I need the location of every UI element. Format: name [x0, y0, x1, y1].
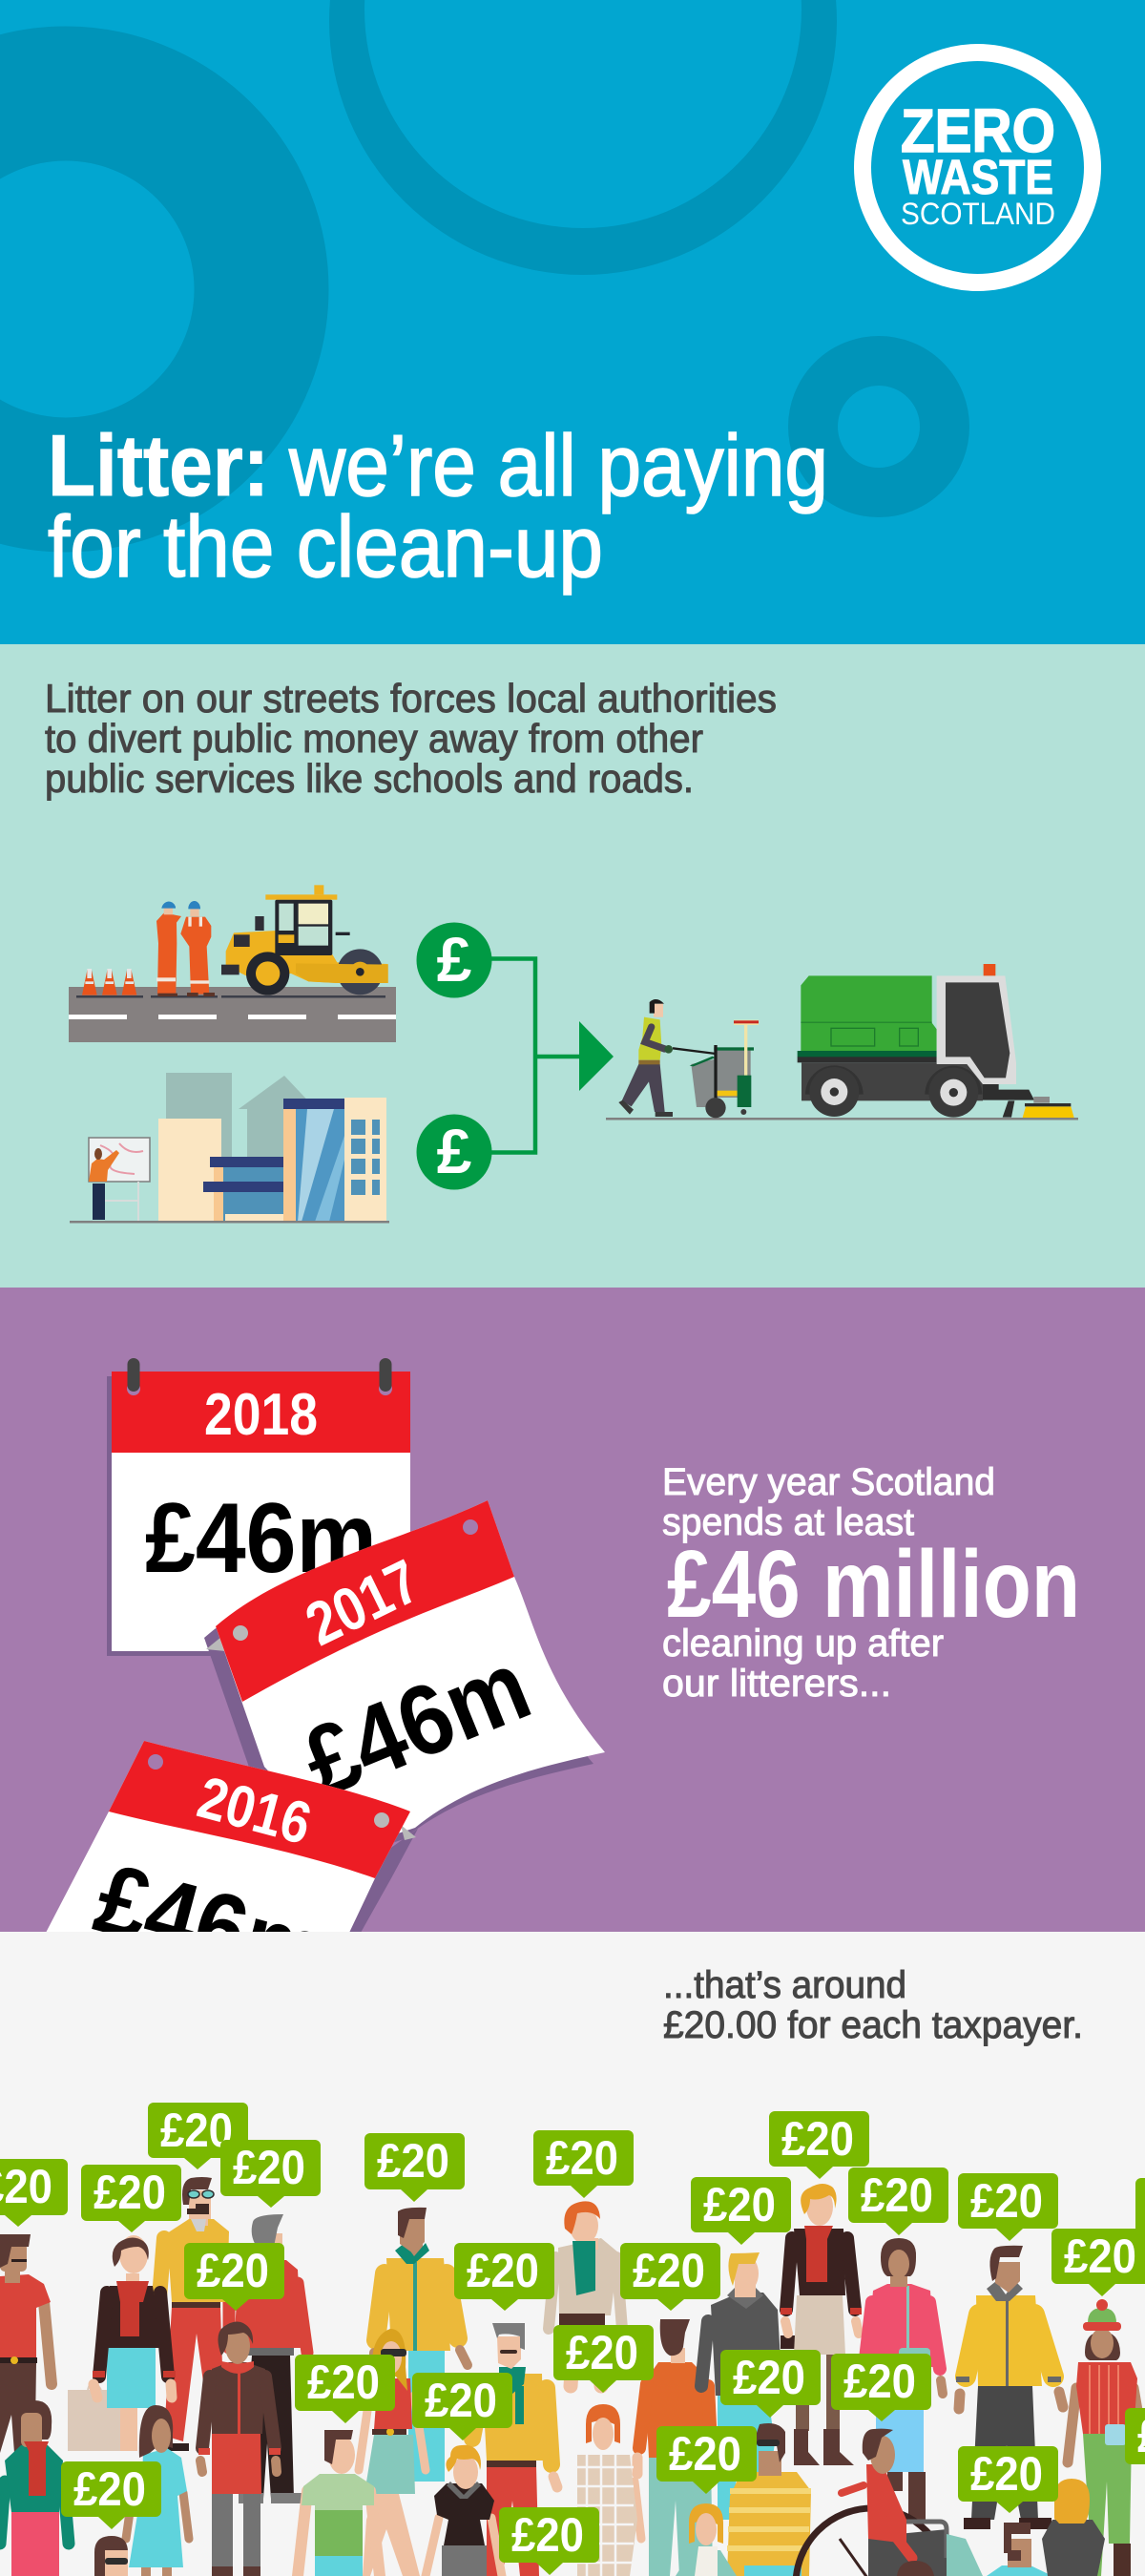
tag	[148, 2103, 248, 2169]
calendar 2018: 2018	[204, 1382, 318, 1448]
icon: pound coin top	[416, 922, 492, 998]
tag	[1135, 2178, 1145, 2233]
price tags: £20	[0, 2103, 1145, 2575]
title: Litter:	[48, 418, 269, 514]
person: man with glasses and yellow jumper	[158, 2177, 229, 2451]
tag	[81, 2165, 181, 2232]
calendar 2016: 2016	[191, 1765, 318, 1857]
tag: £20	[970, 2174, 1043, 2228]
tag: £20	[970, 2447, 1043, 2501]
tag: £20	[843, 2355, 916, 2408]
text: cost per taxpayer: £20.00 for each taxpayer.	[663, 2004, 1083, 2046]
tag	[553, 2325, 654, 2393]
background ring: right	[813, 361, 945, 492]
tag: £20	[425, 2374, 497, 2427]
whiteboard and planner	[89, 1138, 150, 1221]
tag	[0, 2159, 68, 2227]
crowd of people	[0, 2177, 1143, 2576]
person: man in orange jumper	[637, 2319, 713, 2576]
tag	[848, 2168, 948, 2235]
text: cost per taxpayer	[663, 1964, 1083, 2046]
illustration: road works	[69, 885, 396, 1042]
tag: £20	[703, 2178, 776, 2231]
tag: £20	[733, 2351, 805, 2404]
person: man in grey hoodie	[701, 2252, 809, 2520]
workers	[156, 913, 211, 995]
person: man with grey hair in red jumper	[229, 2214, 307, 2503]
title: we’re all paying	[288, 418, 828, 514]
tag: £20	[160, 2104, 233, 2157]
person: man with moustache and yellow jumper	[472, 2323, 557, 2576]
person: wheelchair user	[796, 2429, 983, 2576]
calendar 2018	[107, 1358, 410, 1656]
tag: £20	[669, 2427, 741, 2481]
tag	[656, 2426, 757, 2494]
person: man in light green t-shirt	[298, 2430, 380, 2576]
person: woman in dark jacket with scarf and bag	[68, 2235, 176, 2451]
title: for the clean-up	[48, 499, 603, 596]
person: woman in green jacket and pink skirt	[0, 2400, 69, 2576]
tag: £20	[1064, 2230, 1136, 2283]
person: woman in grey t-shirt, bottom right	[1042, 2479, 1105, 2576]
logo: Zero Waste Scotland: ZERO	[901, 96, 1055, 165]
illustration: street sweeper and worker	[606, 964, 1078, 1120]
person: bearded man, bottom right	[987, 2523, 1052, 2576]
person: woman in cyan dress	[126, 2405, 189, 2576]
tag	[533, 2130, 634, 2198]
text: £46 million per year: Every year Scotland	[662, 1461, 995, 1503]
person: woman with sunglasses, bottom left	[94, 2536, 128, 2576]
tag: £20	[377, 2134, 449, 2188]
tag: £20	[73, 2462, 146, 2516]
icon: pound coin bottom: £	[437, 1116, 472, 1186]
tag: £20	[633, 2244, 705, 2297]
tag	[691, 2177, 791, 2245]
arrow: money flow	[491, 958, 614, 1153]
tag	[831, 2354, 931, 2421]
person: man in yellow jacket with teal collar	[374, 2208, 468, 2482]
cones	[82, 969, 136, 995]
text: £46 million per year: spends at least	[662, 1501, 914, 1543]
intro text: Litter on our streets forces local authorities	[45, 676, 777, 721]
panel: crowd of taxpayers	[0, 1932, 1145, 2576]
calendar 2017	[204, 1500, 605, 1863]
tag: £20	[861, 2168, 933, 2222]
worker with cart	[618, 999, 759, 1118]
tag	[295, 2355, 395, 2423]
person: woman in striped top and hat	[1068, 2299, 1143, 2576]
logo: Zero Waste Scotland: WASTE	[903, 150, 1053, 204]
tag	[1051, 2229, 1145, 2296]
calendar 2016	[46, 1741, 418, 2010]
tag: £20	[197, 2244, 269, 2297]
tag	[499, 2507, 599, 2575]
person: man in striped jumper with sunglasses	[727, 2423, 811, 2576]
person: woman with brown jacket and red skirt	[198, 2321, 281, 2576]
tag: £20	[511, 2508, 584, 2562]
tag: £20	[566, 2326, 638, 2379]
intro text: public services like schools and roads.	[45, 756, 694, 801]
calendar 2017: £46m	[288, 1630, 545, 1819]
tag	[958, 2173, 1058, 2241]
panel: public money diverted to clean-up	[0, 644, 1145, 1288]
tag	[620, 2243, 720, 2311]
text: £46 million per year: cleaning up after	[662, 1623, 944, 1665]
tag	[184, 2243, 284, 2311]
person: woman in pink top	[864, 2238, 943, 2522]
icon: pound coin top: £	[437, 924, 472, 995]
tag	[720, 2350, 821, 2418]
person: woman with sunglasses and teal skirt	[359, 2329, 426, 2576]
calendar 2018: £46m	[145, 1483, 377, 1594]
title	[48, 418, 828, 596]
tag	[1125, 2408, 1145, 2464]
tag	[958, 2446, 1058, 2513]
text: £46 million per year: our litterers...	[662, 1663, 891, 1705]
tag	[220, 2140, 321, 2208]
tag: £20	[781, 2112, 854, 2166]
sweeper vehicle	[798, 964, 1074, 1118]
person: man in yellow jacket with grey trousers	[956, 2246, 1063, 2529]
calendar 2017: 2017	[295, 1546, 430, 1659]
tag	[364, 2133, 465, 2202]
person: man in red t-shirt	[0, 2234, 52, 2491]
person: woman with red hair and teal scarf	[549, 2201, 622, 2386]
tag	[769, 2111, 869, 2179]
person: woman in black blouse	[426, 2445, 502, 2576]
logo: Zero Waste Scotland: SCOTLAND	[901, 197, 1055, 231]
tag	[454, 2243, 554, 2311]
tag: £20	[546, 2131, 618, 2185]
panel: cost of litter calendars	[0, 1288, 1145, 1932]
background ring: top	[329, 0, 837, 275]
illustration: city planning buildings	[70, 1073, 389, 1224]
tag	[412, 2373, 512, 2440]
tag: £20	[467, 2244, 539, 2297]
tag	[61, 2461, 161, 2529]
text: £46 million per year	[662, 1461, 1080, 1705]
intro text	[45, 676, 777, 801]
logo: Zero Waste Scotland	[863, 52, 1093, 283]
person: woman in dark jacket and beige skirt	[781, 2184, 862, 2465]
tag: £20	[94, 2166, 166, 2219]
person: woman in plaid dress	[574, 2404, 641, 2576]
person: woman in teal jacket, bottom	[676, 2503, 737, 2576]
tag: £20	[307, 2356, 380, 2409]
panel: header	[0, 0, 1145, 644]
road roller	[226, 931, 388, 983]
icon: pound coin bottom	[416, 1115, 492, 1189]
background ring: left	[0, 94, 261, 485]
intro text: to divert public money away from other	[45, 716, 703, 761]
tag: £20	[233, 2141, 305, 2194]
text: cost per taxpayer: ...that’s around	[663, 1964, 906, 2006]
